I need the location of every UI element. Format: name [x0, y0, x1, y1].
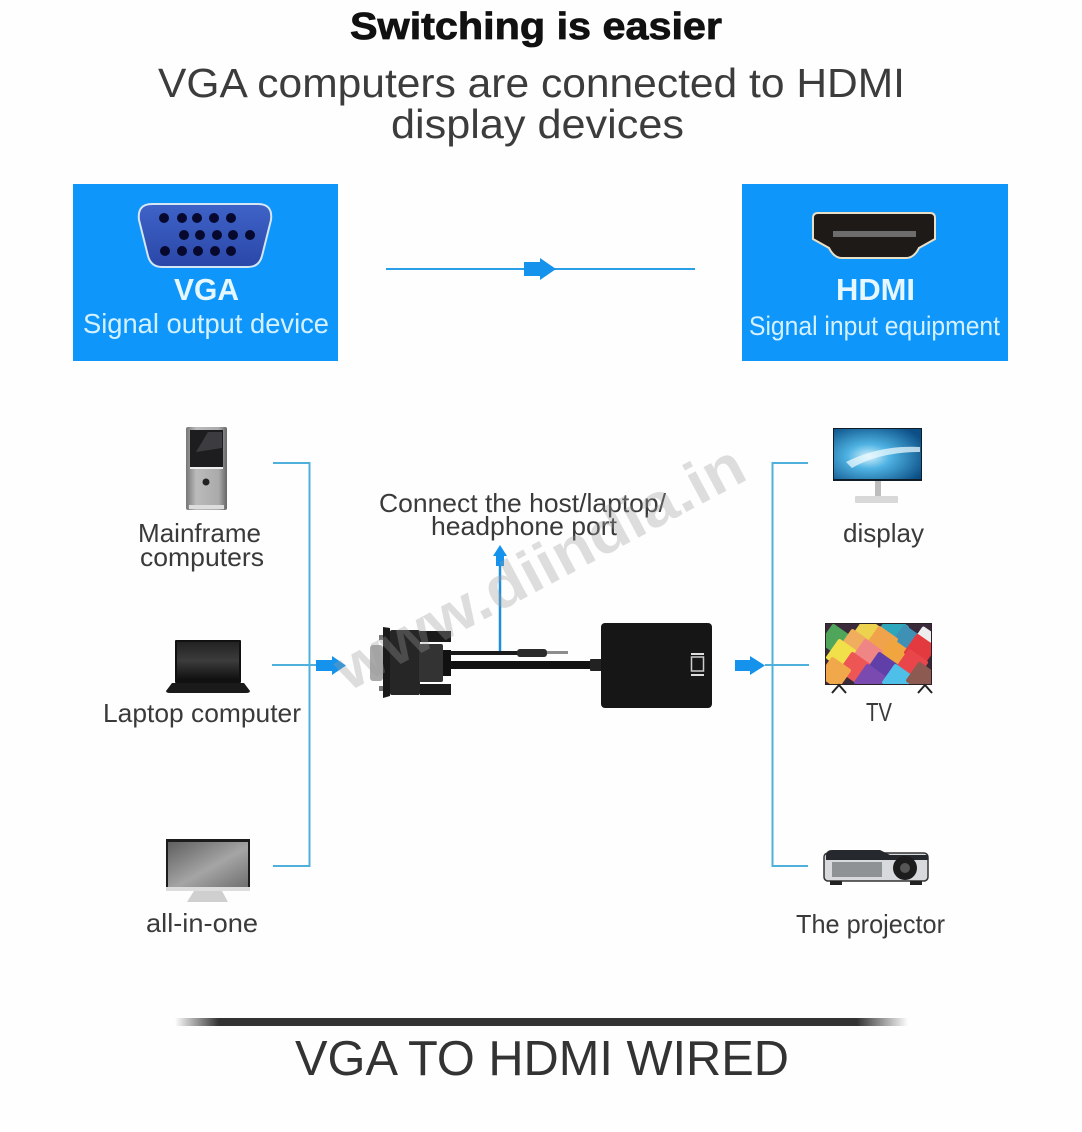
- panel: VGA signal output device: [73, 184, 338, 361]
- icon: laptop: [166, 640, 250, 693]
- HDMI label: HDMI: [836, 272, 915, 307]
- label: headphone port: [379, 488, 667, 541]
- subtitle: VGA computers are connected to HDMI: [158, 60, 905, 106]
- label: Mainframe computers: Mainframe: [138, 518, 261, 548]
- main cable: [450, 661, 602, 669]
- arrow: out of adapter: [735, 656, 765, 675]
- arrow: to audio port: [493, 545, 507, 652]
- label: headphone port: headphone port: [431, 511, 618, 541]
- left bracket: source devices: [272, 463, 316, 866]
- audio cable and jack: [450, 649, 568, 657]
- icon: all-in-one computer: [166, 839, 250, 902]
- subtitle: display devices: [391, 101, 684, 147]
- label: Mainframe computers: [138, 518, 264, 572]
- divider bar: [175, 1018, 908, 1026]
- VGA plug: [370, 627, 451, 698]
- right bracket: display devices: [765, 463, 809, 866]
- label: all-in-one: all-in-one: [146, 908, 258, 938]
- VGA caption: Signal output device: [83, 308, 329, 339]
- title: Switching is easier: [350, 6, 722, 48]
- label: headphone port: Connect the host/laptop/: [379, 488, 667, 518]
- icon: mainframe tower: [186, 427, 227, 510]
- label: TV: TV: [866, 697, 893, 727]
- panel: HDMI signal input equipment: [742, 184, 1008, 361]
- arrow: into adapter: [316, 656, 346, 675]
- icon: VGA connector: [139, 204, 271, 267]
- label: Mainframe computers: computers: [140, 542, 264, 572]
- footer title: VGA TO HDMI WIRED: [295, 1032, 789, 1086]
- icon: projector: [824, 850, 928, 885]
- adapter box: [601, 623, 712, 708]
- flow arrow: VGA to HDMI: [386, 258, 695, 280]
- subtitle: [158, 60, 905, 147]
- VGA label: VGA: [174, 272, 239, 307]
- label: The projector: The projector: [796, 909, 945, 939]
- icon: HDMI connector: [813, 213, 935, 258]
- watermark: www.diindia.in: [322, 431, 756, 704]
- label: Laptop computer: Laptop computer: [103, 698, 301, 728]
- HDMI caption: Signal input equipment: [749, 311, 1000, 341]
- label: display: display: [843, 518, 924, 548]
- adapter cable product: [370, 623, 712, 708]
- icon: display monitor: [833, 428, 922, 503]
- icon: TV: [825, 623, 933, 694]
